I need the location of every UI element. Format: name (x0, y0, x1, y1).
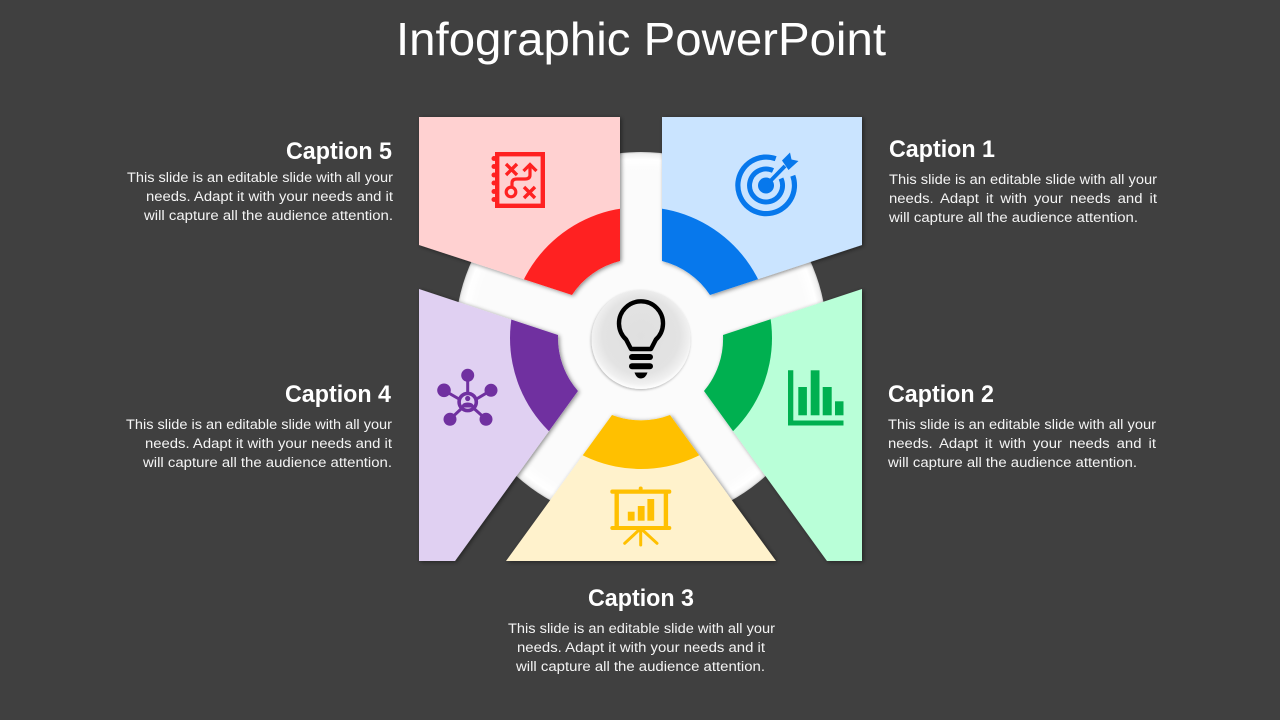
icon: bar chart (788, 370, 844, 426)
text block: caption 1: will capture all the audience attention. (888, 210, 1138, 225)
panel: caption 2 green (704, 289, 862, 561)
text block: caption 3 (508, 585, 776, 674)
text block: caption 1: Caption 1 (889, 136, 995, 163)
green panel shape (704, 289, 862, 561)
text block: caption 2: This slide is an editable slide with all your (888, 417, 1157, 432)
text block: caption 1: needs. Adapt it with your needs and it (889, 191, 1157, 206)
text block: caption 5: will capture all the audience attention. (143, 208, 393, 223)
text block: caption 2: Caption 2 (888, 381, 994, 408)
icon: network of people (437, 369, 498, 426)
blue panel shape (662, 117, 862, 295)
yellow ring segment (582, 415, 700, 469)
red panel shape (419, 117, 620, 295)
panel: caption 5 red (419, 117, 620, 295)
text block: caption 5: This slide is an editable slide with all your (127, 170, 394, 185)
text block: caption 4: will capture all the audience attention. (142, 455, 392, 470)
knob disc (592, 290, 690, 389)
red ring segment (524, 208, 620, 295)
green ring segment (704, 319, 772, 432)
text block: caption 2: needs. Adapt it with your needs and it (888, 436, 1156, 451)
text block: caption 4 (126, 381, 393, 470)
panel: caption 1 blue (662, 117, 862, 295)
text block: caption 3: will capture all the audience attention. (515, 659, 765, 674)
icon: target with arrow (738, 152, 798, 214)
center knob with lightbulb (592, 290, 690, 389)
purple ring segment (510, 320, 578, 432)
text block: caption 1 (888, 136, 1158, 225)
purple panel shape (419, 289, 578, 561)
text block: caption 4: needs. Adapt it with your needs and it (145, 436, 392, 451)
text block: caption 4: This slide is an editable slide with all your (126, 417, 393, 432)
blue ring segment (662, 208, 758, 295)
icon: strategy notebook (492, 154, 543, 206)
text block: caption 2: will capture all the audience attention. (887, 455, 1137, 470)
text block: caption 3: Caption 3 (588, 585, 694, 612)
icon: lightbulb (619, 301, 663, 378)
text block: caption 5: Caption 5 (286, 138, 392, 165)
text block: caption 5: needs. Adapt it with your needs and it (146, 189, 393, 204)
panel: caption 4 purple (419, 289, 578, 561)
text block: caption 2 (887, 381, 1157, 470)
title: Infographic PowerPoint (396, 13, 886, 65)
slide canvas (126, 22, 1157, 674)
yellow panel shape (506, 415, 776, 561)
panel: caption 3 yellow (506, 415, 776, 561)
text block: caption 3: needs. Adapt it with your needs and it (517, 640, 765, 655)
text block: caption 5 (127, 138, 394, 223)
text block: caption 3: This slide is an editable slide with all your (508, 621, 776, 636)
white wheel (455, 152, 827, 524)
text block: caption 1: This slide is an editable slide with all your (889, 172, 1158, 187)
text block: caption 4: Caption 4 (285, 381, 392, 408)
icon: presentation board (610, 486, 671, 545)
